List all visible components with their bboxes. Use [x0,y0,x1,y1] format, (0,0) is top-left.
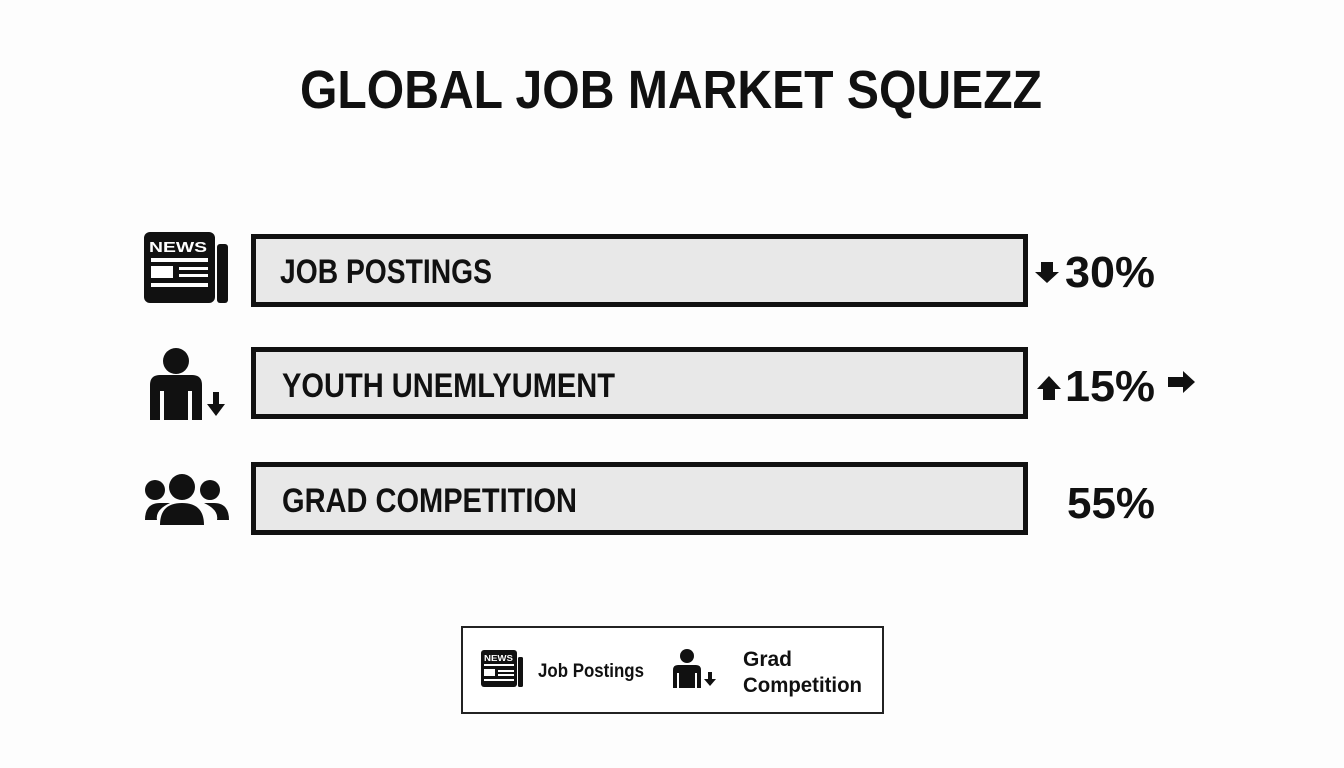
bar: grad competition [254,464,1026,532]
value: +15%: 15% [1065,362,1155,411]
title: GLOBAL JOB MARKET SQUEZZ [300,60,1042,120]
value: 55%: 55% [1067,479,1155,528]
row: youth unemployment [150,348,1195,420]
legend [462,627,883,713]
legend icon: newspaper [481,650,523,687]
icon: newspaper: NEWS [149,239,207,256]
value: -30%: 30% [1065,248,1155,297]
legend icon: person down [673,649,716,688]
icon: person down [150,348,225,420]
legend icon: newspaper: NEWS [484,654,514,663]
legend text: grad competition: Grad [743,648,792,671]
legend text: job postings: Job Postings [538,661,644,682]
label: youth unemployment: YOUTH UNEMLYUMENT [282,367,615,405]
legend: Competition [743,674,862,697]
label: job postings: JOB POSTINGS [280,253,492,291]
row: job postings [144,232,1155,304]
row: grad competition [145,464,1155,532]
value: +15% [1037,362,1195,411]
bar: job postings [254,236,1026,304]
label: grad competition: GRAD COMPETITION [282,482,577,520]
icon: group [145,474,229,525]
icon: newspaper [144,232,228,303]
bar: youth unemployment [254,350,1026,416]
